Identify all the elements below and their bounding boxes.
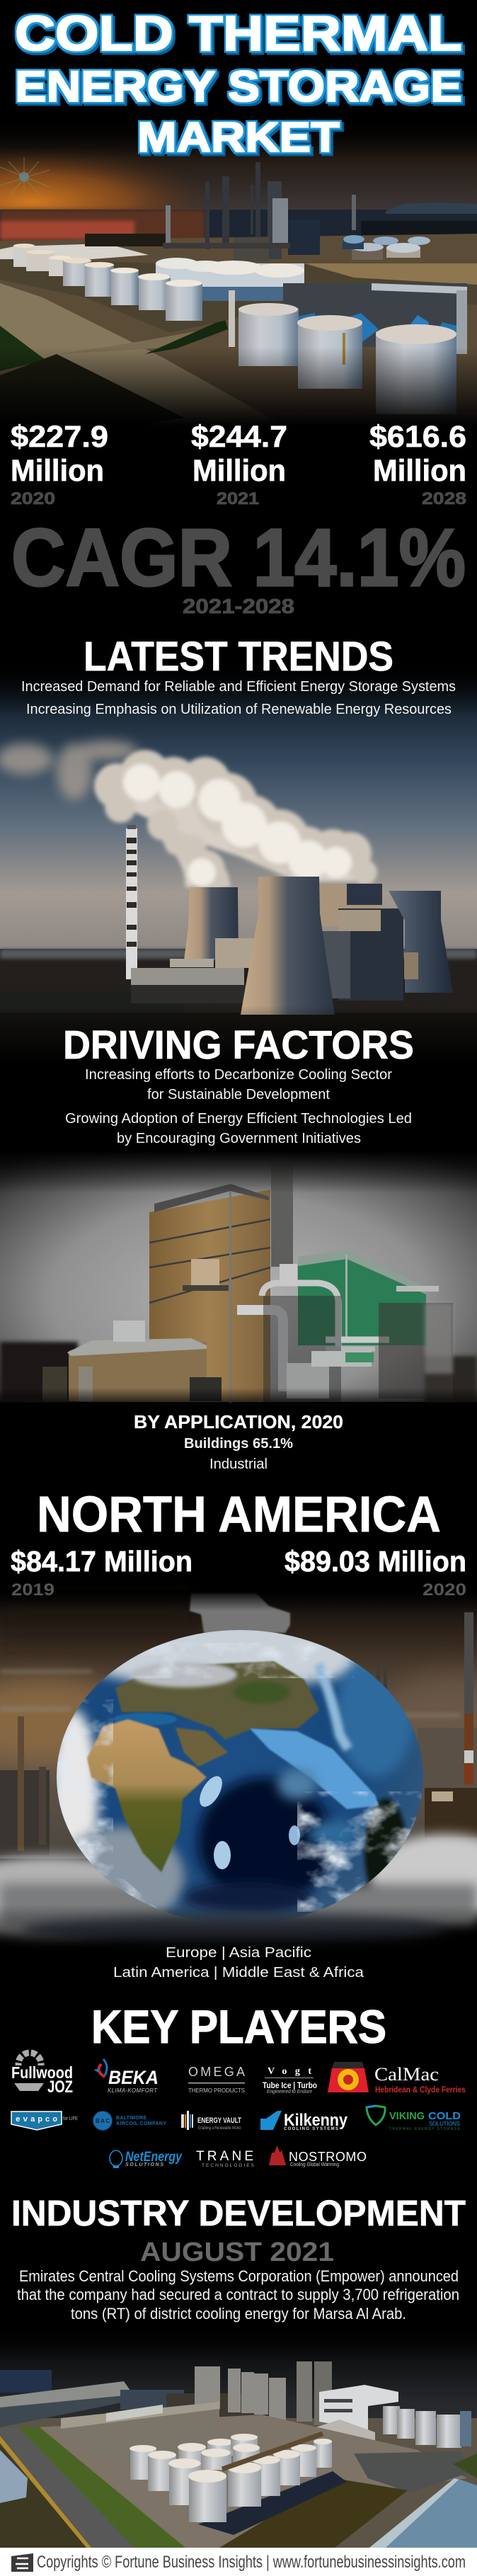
- smoke atop the globe: [190, 1593, 290, 1633]
- logo: Viking Cold Solutions: VIKING: [389, 2110, 425, 2122]
- logo: Nostromo: [269, 2145, 367, 2167]
- section: latest trends: LATEST TRENDS: [84, 634, 393, 680]
- Eurasia: [115, 1661, 319, 1740]
- logo: Omega Thermo Products: [188, 2065, 245, 2094]
- section: driving factors: [63, 1022, 414, 1146]
- logo: Kilkenny Cooling Systems: COOLING SYSTEMS: [284, 2127, 338, 2131]
- logo: Energy Vault: Enabling a Renewable World: [198, 2126, 241, 2131]
- section: north america: $84.17 Million: [11, 1545, 192, 1578]
- globe: [50, 1619, 425, 1926]
- Mediterranean water: [113, 1713, 177, 1726]
- section: driving factors: by Encouraging Government Initiatives: [117, 1131, 361, 1146]
- section: industry development: AUGUST 2021: [140, 2238, 334, 2267]
- shadow on the yard: [198, 2471, 347, 2535]
- footer bar: [0, 2548, 477, 2576]
- industrial silhouettes: [0, 1612, 477, 1855]
- scattered clouds: [277, 1769, 317, 1800]
- silver pipework: [237, 1264, 439, 1391]
- section: by application: Buildings 65.1%: [184, 1436, 293, 1452]
- logo: Fullwood JOZ: Fullwood: [11, 2063, 73, 2082]
- section: north america: 2019: [11, 1580, 54, 1600]
- industrial chimneys and columns: [163, 162, 356, 262]
- striped chimney: [126, 825, 137, 979]
- logo: BEKA: BEKA: [108, 2067, 159, 2088]
- logo: Viking Cold Solutions: [367, 2106, 461, 2131]
- logo: Fullwood JOZ: [10, 2053, 74, 2097]
- logo: NetEnergy Solutions: [110, 2150, 183, 2168]
- section: by application: BY APPLICATION, 2020: [134, 1411, 343, 1432]
- stat: 2020 market size: 2020: [11, 489, 55, 508]
- stat: 2021 market size: [191, 420, 287, 508]
- steam plume: [94, 750, 377, 891]
- mist over globe base: [21, 1914, 446, 1945]
- logo: Omega Thermo Products: OMEGA: [188, 2065, 245, 2079]
- section: north america: [11, 1487, 466, 1600]
- right-side tanks: [383, 2406, 471, 2448]
- high-altitude smoke: [0, 741, 138, 800]
- stat: 2020 market size: [11, 420, 108, 508]
- low utility building: [42, 1321, 222, 1402]
- section: industry development: INDUSTRY DEVELOPMENT: [11, 2193, 466, 2233]
- logo: Trane Technologies: TECHNOLOGIES: [202, 2163, 255, 2168]
- stat: 2021 market size: $244.7: [191, 420, 287, 454]
- section: by application: Industrial: [209, 1457, 268, 1472]
- section: latest trends: Increasing Emphasis on Utilization of Renewable Energy Resources: [26, 702, 452, 717]
- right cooling tower: [389, 891, 453, 993]
- section heading: key players: KEY PLAYERS: [91, 2000, 386, 2053]
- logo: Kilkenny Cooling Systems: [260, 2111, 348, 2131]
- logo: Viking Cold Solutions: COLD: [428, 2110, 461, 2122]
- section: driving factors: Increasing efforts to Decarbonize Cooling Sector: [85, 1067, 392, 1083]
- logo: Evapco: for LIFE: [63, 2116, 78, 2121]
- main title: COLD THERMAL: [15, 6, 462, 61]
- stat: 2028 market size: Million: [373, 454, 466, 488]
- logo: Baltimore Aircoil Company: BALTIMORE: [116, 2116, 146, 2121]
- logo: Vogt Tube Ice Turbo: Tube Ice | Turbo: [263, 2080, 317, 2090]
- CAGR figure: 2021-2028: [183, 595, 294, 618]
- central white tanks: [130, 2434, 332, 2522]
- logo: CalMac: [328, 2062, 466, 2095]
- logo: CalMac: CalMac: [374, 2064, 439, 2085]
- icon: Fortune Business Insights logo: [11, 2553, 33, 2572]
- logo: NetEnergy Solutions: SOLUTIONS: [125, 2162, 163, 2167]
- photo: power plant with cooling towers: [0, 667, 477, 1066]
- logo: Viking Cold Solutions: THERMAL ENERGY STORAGE: [389, 2127, 461, 2131]
- polar cloud: [100, 1630, 368, 1691]
- background buildings: [0, 2370, 262, 2427]
- row of smaller storage tanks: [13, 244, 202, 321]
- Africa: [87, 1719, 207, 1872]
- logo: Energy Vault: ENERGY VAULT: [197, 2116, 241, 2125]
- logo: Omega Thermo Products: THERMO PRODUCTS: [188, 2087, 245, 2094]
- left limb clouds: [50, 1710, 98, 1887]
- section: driving factors: Growing Adoption of Energy Efficient Technologies Led: [65, 1111, 412, 1127]
- large foreground tanks: [229, 290, 456, 414]
- blue process machinery: [283, 283, 467, 368]
- section: latest trends: Increased Demand for Reliable and Efficient Energy Storage Systems: [21, 679, 456, 695]
- section: north america: 2020: [423, 1580, 466, 1600]
- central cooling tower: [241, 877, 335, 1015]
- logo: Baltimore Aircoil Company: BAC: [96, 2118, 110, 2124]
- stat: 2028 market size: [369, 420, 466, 508]
- concrete yard: [35, 2415, 467, 2548]
- other regions list: [113, 1945, 364, 1981]
- section: industry development: tons (RT) of district cooling energy for Marsa Al Arab.: [71, 2305, 406, 2323]
- logo: Fullwood JOZ: JOZ: [47, 2078, 73, 2097]
- main title: [15, 6, 462, 161]
- section: driving factors: for Sustainable Development: [147, 1087, 330, 1102]
- cloud texture over limb and ocean: [57, 1643, 425, 1926]
- stat: 2021 market size: 2021: [217, 489, 259, 508]
- section: latest trends: [21, 634, 456, 717]
- stat: 2021 market size: Million: [192, 454, 286, 488]
- logo: BEKA: [93, 2059, 159, 2094]
- right ocean highlights: [336, 1650, 414, 1777]
- logo: Nostromo: NOSTROMO: [289, 2150, 367, 2164]
- dark southern land: [362, 1796, 408, 1883]
- section: north america: $89.03 Million: [285, 1545, 466, 1578]
- logo: Nostromo: Cooling Global Warming: [290, 2162, 339, 2167]
- logo: BEKA: KLIMA-KOMFORT: [108, 2087, 158, 2094]
- white building: [311, 2385, 398, 2450]
- main title: ENERGY STORAGE: [15, 62, 462, 110]
- stat: 2020 market size: Million: [11, 454, 104, 488]
- diagonal conveyor: [222, 2434, 323, 2469]
- logo: Viking Cold Solutions: SOLUTIONS: [429, 2121, 460, 2127]
- background silos: [195, 2361, 332, 2425]
- section: north america: NORTH AMERICA: [37, 1487, 441, 1543]
- stack: [271, 1164, 293, 1267]
- left cooling tower: [184, 887, 238, 960]
- green building: [298, 1250, 426, 1345]
- photo: melting globe over industrial landscape: [0, 1590, 477, 1990]
- logo: NetEnergy Solutions: NetEnergy: [125, 2150, 183, 2165]
- section: by application: [134, 1411, 343, 1472]
- field areas and road: [0, 259, 477, 425]
- logo: Energy Vault: [181, 2111, 241, 2131]
- photo: thermal storage plant at sunset: [0, 117, 477, 426]
- tan tower building: [149, 1184, 270, 1403]
- mist bank: [0, 1834, 477, 1940]
- stat: 2028 market size: $616.6: [369, 420, 466, 454]
- logo: Vogt Tube Ice Turbo: Engineered to Endure: [267, 2090, 312, 2095]
- roof of foreground building: [369, 2478, 477, 2548]
- logo: Baltimore Aircoil Company: [93, 2111, 166, 2130]
- logo: Vogt Tube Ice Turbo: Vogt: [268, 2066, 311, 2077]
- section: driving factors: DRIVING FACTORS: [63, 1022, 414, 1068]
- ice swirl: [250, 1728, 379, 1809]
- dark ocean: [198, 1777, 333, 1905]
- section: industry development: [11, 2193, 466, 2323]
- logo: Kilkenny Cooling Systems: Kilkenny: [284, 2111, 348, 2130]
- plant buildings: [131, 884, 403, 1003]
- other regions list: Europe | Asia Pacific: [166, 1945, 311, 1961]
- long pipe rack building: [61, 2402, 219, 2464]
- photo: tank farm aerial view: [0, 2326, 477, 2548]
- Arabia: [176, 1728, 228, 1767]
- photo: industrial cooling plant: [0, 1151, 477, 1420]
- logo: Vogt Tube Ice Turbo: [263, 2066, 317, 2095]
- left road and grass strip: [0, 2427, 185, 2548]
- steel frame and cabinets: [263, 1296, 453, 1402]
- asphalt yard: [354, 2451, 474, 2492]
- grass area: [219, 2478, 408, 2548]
- stat: 2028 market size: 2028: [422, 489, 466, 508]
- stat: 2020 market size: $227.9: [11, 420, 108, 454]
- logo: Trane Technologies: TRANE: [196, 2149, 253, 2164]
- main title: MARKET: [137, 114, 340, 161]
- domed rear tanks: [156, 235, 430, 301]
- logo: Evapco: evapco: [16, 2116, 57, 2124]
- logo: Baltimore Aircoil Company: AIRCOIL COMPANY: [116, 2121, 166, 2126]
- logo: Evapco: [11, 2111, 78, 2130]
- other regions list: Latin America | Middle East & Africa: [113, 1965, 364, 1981]
